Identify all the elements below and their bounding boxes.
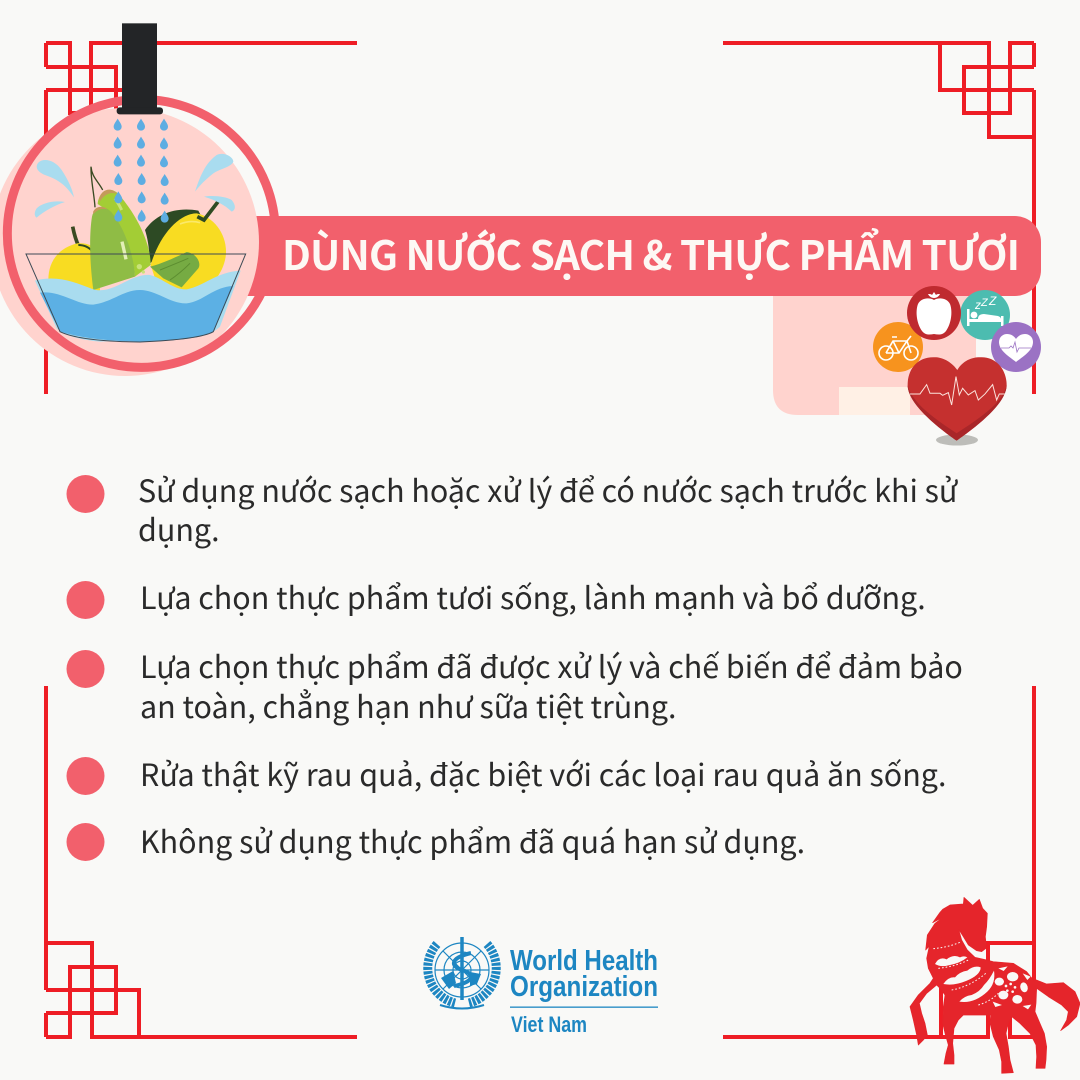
bullet 5: Không sử dụng thực phẩm đã quá hạn sử dụng. xyxy=(140,818,805,862)
horse paper-cut details xyxy=(933,942,1031,1009)
bullet 4: Rửa thật kỹ rau quả, đặc biệt với các loại rau quả ăn sống. xyxy=(140,751,946,795)
pink backdrop panel with notch xyxy=(773,296,976,415)
bullet 1: dụng. xyxy=(138,506,220,550)
bullet 3: an toàn, chẳng hạn như sữa tiệt trùng. xyxy=(140,683,676,727)
bullet 1 xyxy=(66,467,958,550)
icon: sleeping in bed: z xyxy=(974,298,981,312)
WHO wordmark: World Health xyxy=(510,945,658,977)
WHO wordmark: Organization xyxy=(510,971,658,1003)
fruit: right lemon and dark leaf xyxy=(145,200,226,293)
paper-cut horse xyxy=(910,897,1080,1073)
icon: sleeping in bed: Z xyxy=(988,294,997,308)
outer ring xyxy=(7,99,275,367)
water drops xyxy=(114,119,169,223)
icon: sleeping in bed xyxy=(960,290,1010,340)
bullet list xyxy=(66,467,963,862)
WHO wordmark xyxy=(510,945,658,1037)
vegetable: green gourds xyxy=(90,167,199,290)
title text: DÙNG NƯỚC SẠCH & THỰC PHẨM TƯƠI xyxy=(282,223,1020,282)
pink circle backdrop xyxy=(0,108,259,376)
WHO logo xyxy=(428,937,658,1037)
icon: heart in purple circle xyxy=(991,322,1041,372)
water splashes xyxy=(35,154,235,218)
bullet 2: Lựa chọn thực phẩm tươi sống, lành mạnh và bổ dưỡng. xyxy=(140,574,926,618)
title banner xyxy=(200,216,1041,296)
WHO wordmark: Viet Nam xyxy=(511,1012,587,1037)
bullet 3 xyxy=(66,643,963,727)
icon: apple xyxy=(907,286,961,340)
bullet 1: Sử dụng nước sạch hoặc xử lý để có nước sạch trước khi sử xyxy=(138,467,958,511)
icon: sleeping in bed: Z xyxy=(980,297,989,309)
health icons cluster xyxy=(873,286,1041,446)
glass bowl with water xyxy=(26,254,246,342)
faucet xyxy=(117,23,163,114)
illustration: faucet and washing bowl xyxy=(0,23,275,376)
icon: bicycle xyxy=(873,322,923,372)
WHO emblem xyxy=(428,937,496,1008)
icon: large heart with ECG line xyxy=(908,357,1007,446)
bullet 3: Lựa chọn thực phẩm đã được xử lý và chế biến để đảm bảo xyxy=(140,643,963,687)
fruit: left lemon xyxy=(48,227,100,310)
